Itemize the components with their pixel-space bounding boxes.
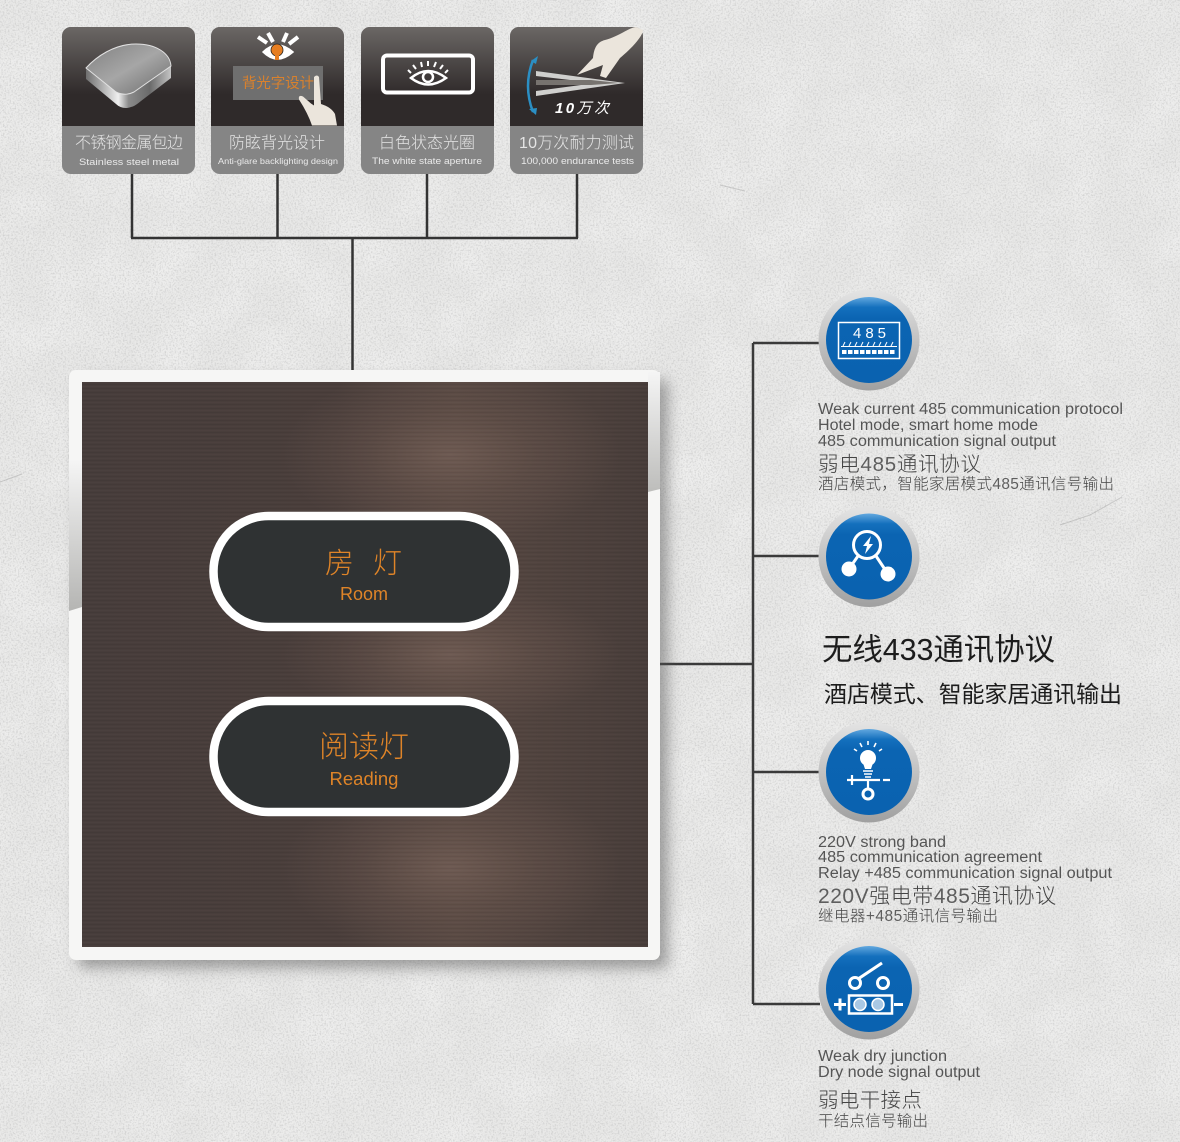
text: weak current 485: 485 communication signal output (818, 433, 1057, 450)
label: The white state aperture: The white state aperture (372, 156, 482, 167)
text: weak dry junction: 干结点信号输出 (818, 1109, 928, 1131)
button: room light: Room (340, 584, 388, 604)
switch panel (69, 365, 660, 960)
text: 220V strong: 220V强电带485通讯协议 (818, 880, 1056, 910)
icon: dry contact switch (834, 963, 903, 1014)
text: 220V strong (818, 834, 1113, 926)
icon: pressed key with hand: 10万次 (555, 100, 611, 117)
icon: wireless nodes (842, 532, 896, 582)
text: 220V strong: Relay +485 communication signal output (818, 865, 1113, 882)
icon: backlit sign (233, 66, 323, 100)
text: weak current 485 (818, 401, 1123, 494)
text: wireless 433 (822, 625, 1122, 709)
button: reading light: 阅读灯 (319, 731, 409, 764)
text: weak dry junction: 弱电干接点 (818, 1083, 922, 1113)
text: weak current 485: 弱电485通讯协议 (818, 447, 981, 477)
protocol badge: 485 (818, 290, 920, 390)
brushed metal plate (82, 365, 648, 958)
text: weak dry junction (818, 1048, 981, 1131)
text: 220V strong: 220V strong band (818, 834, 946, 851)
icon: backlit sign: 背光字设计 (242, 75, 314, 92)
label: 防眩背光设计: 防眩背光设计 (229, 129, 325, 153)
feature card: anti-glare (211, 27, 344, 174)
label: 不锈钢金属包边: 不锈钢金属包边 (75, 129, 183, 153)
text: weak current 485: Weak current 485 communication protocol (818, 401, 1123, 418)
text: wireless 433: 无线433通讯协议 (822, 625, 1055, 669)
panel shadow (78, 380, 668, 968)
feature card: endurance (510, 27, 643, 174)
label: Anti-glare backlighting design: Anti-glare backlighting design (218, 156, 338, 166)
label: 白色状态光圈: 白色状态光圈 (379, 129, 475, 153)
label: Stainless steel metal: Stainless steel metal (79, 157, 179, 168)
icon: steel corner (86, 44, 171, 108)
text: weak current 485: 酒店模式，智能家居模式485通讯信号输出 (818, 472, 1114, 494)
top connector lines (131, 174, 578, 370)
text: wireless 433: 酒店模式、智能家居通讯输出 (824, 675, 1122, 709)
text: weak current 485: Hotel mode, smart home mode (818, 417, 1038, 434)
feature card: stainless steel (62, 27, 195, 174)
button: room light: 房 灯 (325, 547, 402, 580)
feature card: white aperture (361, 27, 494, 174)
icon: eye with bulb (258, 33, 298, 60)
icon: bulb with relay (847, 741, 890, 799)
label: 10万次耐力测试: 10万次耐力测试 (519, 129, 634, 153)
protocol badge: wireless 433 (818, 506, 920, 607)
protocol badge: 220V (818, 722, 920, 822)
icon: hand (299, 76, 337, 126)
button: room light (214, 516, 514, 627)
text: 220V strong: 485 communication agreement (818, 849, 1043, 866)
right connector lines (660, 343, 820, 1004)
text: 220V strong: 继电器+485通讯信号输出 (818, 904, 998, 926)
text: weak dry junction: Weak dry junction (818, 1048, 947, 1065)
button: reading light: Reading (330, 768, 398, 789)
icon: 485 terminal: 485 (853, 325, 886, 342)
protocol badge: dry contact (818, 938, 920, 1040)
button: reading light (214, 701, 514, 812)
icon: pressed key with hand (528, 27, 643, 117)
icon: aperture frame with eye (383, 56, 473, 92)
text: weak dry junction: Dry node signal output (818, 1064, 981, 1081)
label: 100,000 endurance tests: 100,000 endurance tests (521, 156, 634, 167)
